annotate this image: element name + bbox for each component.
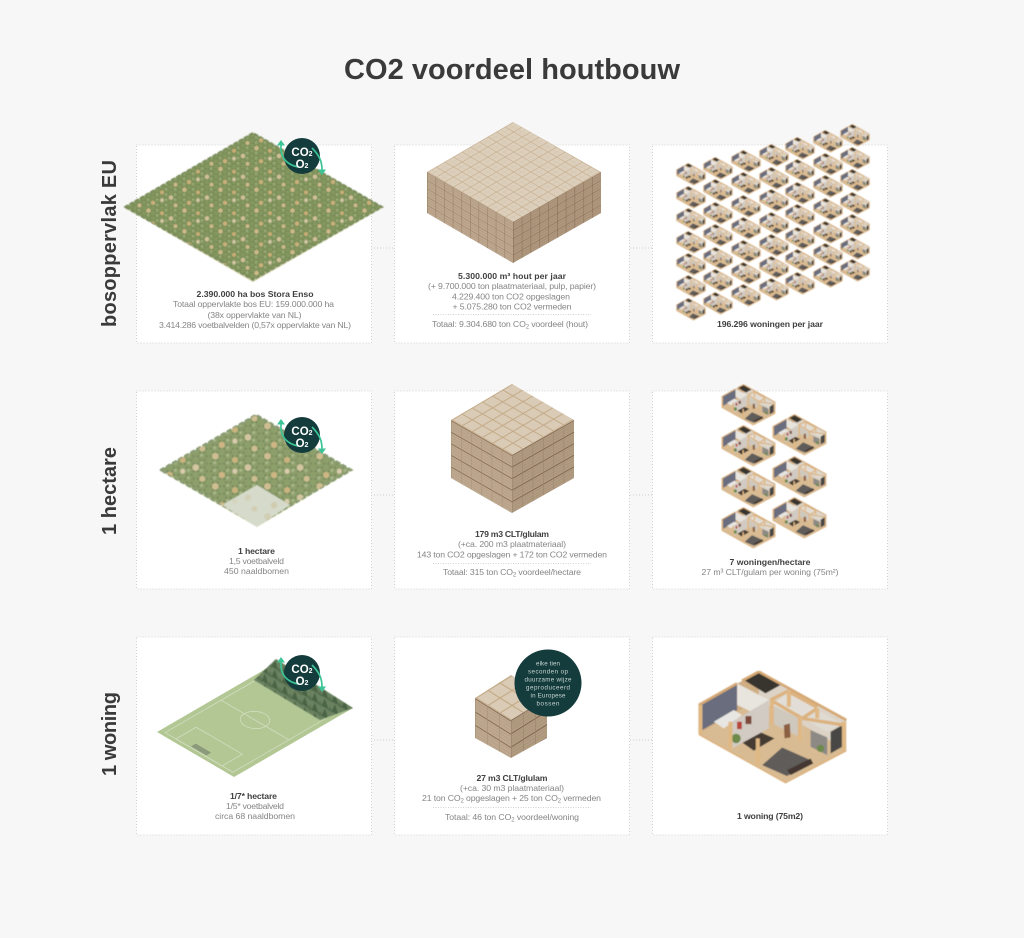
CLT woning caption: vermeden (561, 793, 601, 803)
wood caption: 2 (526, 324, 530, 330)
wood caption: + 5.075.280 ton CO2 vermeden (452, 302, 572, 312)
panel: bos EU (125, 133, 382, 343)
highlighted hectare (222, 485, 290, 527)
large house (699, 672, 846, 784)
wood cube medium (451, 384, 574, 513)
football field (157, 663, 353, 777)
CLT woning caption: 21 ton CO (422, 793, 461, 803)
field caption: circa 68 naaldbomen (215, 811, 295, 821)
CO2 badge: CO2 (291, 147, 313, 159)
hectare caption: 450 naaldbomen (224, 566, 289, 576)
panel: woningen per hectare (652, 385, 888, 589)
panel: 1 woning field (136, 637, 372, 835)
forest caption: Totaal oppervlakte bos EU: 159.000.000 ha (173, 299, 334, 309)
seven houses (722, 385, 826, 548)
CO2 badge: O2 (296, 159, 309, 171)
forest caption: 3.414.286 voetbalvelden (0,57x oppervlakte van NL) (159, 320, 351, 330)
CLT woning caption: Totaal: 46 ton CO (445, 812, 511, 822)
CO2 badge: O2 (296, 438, 309, 450)
CLT woning caption: 2 (511, 818, 515, 824)
CLT woning caption: 27 m3 CLT/glulam (476, 773, 548, 783)
callout circle: in Europese (530, 692, 566, 700)
house caption: 1 woning (75m2) (737, 811, 803, 821)
wood cube large (427, 122, 601, 263)
panel: woningen per jaar (652, 124, 888, 343)
tree strip (254, 659, 353, 720)
panel: CLT per hectare (394, 384, 630, 589)
CLT woning caption: opgeslagen + 25 ton CO (464, 793, 558, 803)
CLT caption: voordeel/hectare (516, 567, 581, 577)
hectare caption: 1 hectare (238, 546, 275, 556)
callout circle: bossen (536, 700, 560, 708)
callout circle (514, 650, 582, 716)
hectare caption (224, 546, 289, 576)
panel: 1 hectare forest (136, 391, 372, 589)
CLT woning caption (422, 773, 601, 824)
forest caption: 2.390.000 ha bos Stora Enso (196, 289, 314, 299)
panel: hout per jaar (394, 122, 630, 343)
CLT woning caption: (+ca. 30 m3 plaatmateriaal) (460, 783, 564, 793)
CLT caption: 143 ton CO2 opgeslagen + 172 ton CO2 vermeden (417, 550, 607, 560)
wood cube small (475, 675, 547, 758)
wood caption: (+ 9.700.000 ton plaatmateriaal, pulp, papier) (428, 281, 596, 291)
seven houses caption: 7 woningen/hectare (730, 557, 811, 567)
seven houses caption (702, 557, 839, 577)
wood caption: voordeel (hout) (529, 319, 588, 329)
field caption: 1/7* hectare (230, 791, 277, 801)
row label: 1 hectare: 1 hectare (99, 447, 121, 535)
CLT caption: 179 m3 CLT/glulam (475, 529, 549, 539)
field caption: 1/5* voetbalveld (226, 801, 284, 811)
CLT woning caption: voordeel/woning (514, 812, 579, 822)
panel: 1 woning (652, 637, 888, 835)
wood caption (428, 271, 596, 330)
CO2 badge: CO2 (291, 426, 313, 438)
CLT caption: (+ca. 200 m3 plaatmateriaal) (458, 539, 566, 549)
wood caption: 4.229.400 ton CO2 opgeslagen (452, 292, 570, 302)
forest diamond medium (161, 415, 351, 527)
row label: bosoppervlak EU: bosoppervlak EU (99, 160, 121, 327)
panel: CLT per woning (394, 637, 630, 835)
seven houses caption: 27 m³ CLT/gulam per woning (75m²) (702, 567, 839, 577)
row label: 1 woning: 1 woning (99, 692, 121, 776)
CO2 badge (277, 655, 326, 692)
CLT woning caption: 2 (558, 798, 562, 804)
callout circle: elke tien (536, 660, 561, 668)
forest caption: (38x oppervlakte van NL) (208, 310, 302, 320)
wood caption: 5.300.000 m³ hout per jaar (458, 271, 567, 281)
title: CO2 voordeel houtbouw (344, 54, 680, 86)
forest diamond large (125, 133, 382, 282)
CO2 badge (277, 417, 326, 454)
field caption (215, 791, 295, 821)
CLT caption: Totaal: 315 ton CO (443, 567, 513, 577)
CLT caption: 2 (513, 572, 517, 578)
forest caption (159, 289, 351, 330)
CO2 badge: CO2 (291, 664, 313, 676)
CO2 badge: O2 (296, 676, 309, 688)
callout circle: geproduceerd (526, 684, 571, 692)
callout circle: duurzame wijze (524, 676, 572, 684)
CO2 badge (277, 138, 326, 175)
grid of mini houses (676, 124, 870, 321)
houses caption: 196.296 woningen per jaar (717, 319, 824, 329)
callout circle: seconden op (528, 668, 569, 676)
hectare caption: 1,5 voetbalveld (229, 556, 284, 566)
wood caption: Totaal: 9.304.680 ton CO (432, 319, 526, 329)
CLT caption (417, 529, 607, 578)
CLT woning caption: 2 (460, 798, 464, 804)
